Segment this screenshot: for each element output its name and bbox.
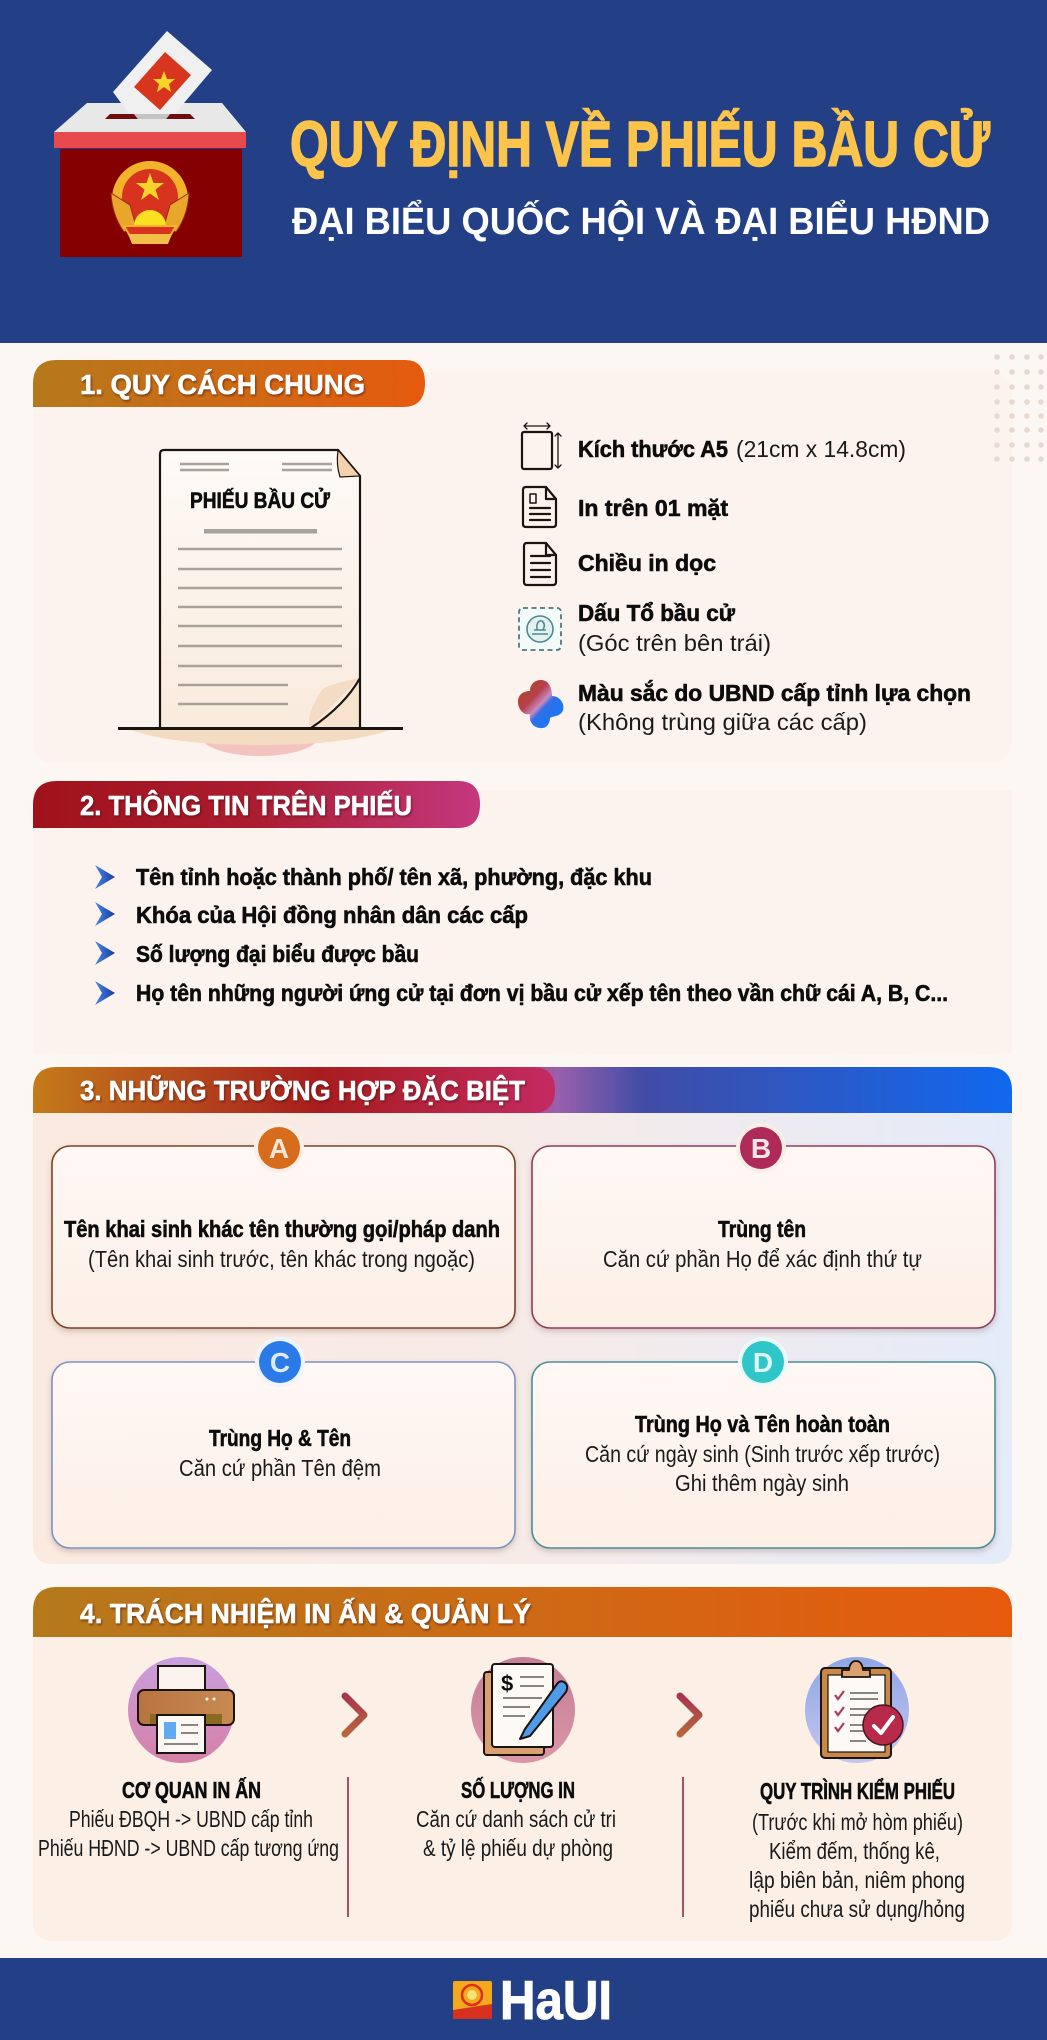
illustration: ballot paper <box>118 450 403 756</box>
header band <box>0 0 1047 343</box>
panel: 1. general specifications <box>33 360 1012 763</box>
icon: printer <box>128 1657 234 1763</box>
column 3: checking process <box>749 1777 965 1922</box>
card D: Ghi thêm ngày sinh <box>675 1470 849 1496</box>
icon: national emblem <box>111 161 189 244</box>
spec: single side <box>523 487 728 527</box>
column 1: printing agency <box>38 1776 339 1861</box>
badge D: D <box>753 1347 773 1378</box>
arrow 2 <box>680 1696 699 1734</box>
heading: section 2 <box>33 781 480 828</box>
bullet 2: Khóa của Hội đồng nhân dân các cấp <box>136 902 528 928</box>
icon: clipboard check <box>805 1657 909 1763</box>
spec: single side: In trên 01 mặt <box>578 495 728 521</box>
decorative dots <box>994 354 1044 462</box>
subtitle: ĐẠI BIỂU QUỐC HỘI VÀ ĐẠI BIỂU HĐND <box>292 198 990 243</box>
column 2: print quantity: SỐ LƯỢNG IN <box>461 1776 575 1803</box>
spec: stamp <box>519 600 771 656</box>
column 2: print quantity: Căn cứ danh sách cử tri <box>416 1806 616 1832</box>
ballot title: PHIẾU BẦU CỬ <box>190 488 331 513</box>
card B: Trùng tên <box>718 1216 806 1242</box>
column 3: checking process: phiếu chưa sử dụng/hỏng <box>749 1896 965 1922</box>
card A: (Tên khai sinh trước, tên khác trong ngoặc) <box>88 1246 475 1272</box>
heading: section 2: 2. THÔNG TIN TRÊN PHIẾU <box>80 789 412 821</box>
badge B: B <box>751 1133 771 1164</box>
icon: document with pen <box>471 1657 575 1763</box>
spec: stamp: Dấu Tổ bầu cử <box>578 600 735 626</box>
card D: Trùng Họ và Tên hoàn toàn <box>635 1411 890 1437</box>
badge A <box>254 1123 304 1173</box>
card A <box>52 1123 515 1328</box>
badge C: C <box>270 1347 290 1378</box>
card C: Trùng Họ & Tên <box>209 1425 351 1451</box>
column 2: print quantity <box>416 1776 616 1861</box>
column 1: printing agency: CƠ QUAN IN ẤN <box>122 1776 261 1803</box>
card C: Căn cứ phần Tên đệm <box>179 1455 381 1481</box>
logo mark <box>453 1981 492 2019</box>
panel: 3. special cases <box>33 1067 1012 1564</box>
bullet 1: Tên tỉnh hoặc thành phố/ tên xã, phường, đặc khu <box>136 864 652 890</box>
spec: portrait: Chiều in dọc <box>578 550 716 576</box>
icon: ballot box <box>54 31 246 257</box>
spec: colour <box>518 679 971 735</box>
badge A: A <box>269 1133 289 1164</box>
icon: document one side <box>523 487 556 527</box>
heading: section 3: 3. NHỮNG TRƯỜNG HỢP ĐẶC BIỆT <box>80 1075 525 1106</box>
card D <box>532 1337 995 1548</box>
badge D <box>738 1337 788 1387</box>
column 2: print quantity: & tỷ lệ phiếu dự phòng <box>423 1835 613 1861</box>
heading: section 3 <box>33 1067 1012 1113</box>
spec: size A5 <box>522 423 906 469</box>
card D: Căn cứ ngày sinh (Sinh trước xếp trước) <box>585 1441 940 1467</box>
spec: portrait <box>524 543 716 585</box>
card B <box>532 1123 995 1328</box>
footer band <box>0 1958 1047 2040</box>
heading: section 4 <box>33 1587 1012 1637</box>
card B: Căn cứ phần Họ để xác định thứ tự <box>603 1246 922 1272</box>
bullet 4: Họ tên những người ứng cử tại đơn vị bầu cử xếp tên theo vần chữ cái A, B, C... <box>136 980 948 1006</box>
heading: section 4: 4. TRÁCH NHIỆM IN ẤN & QUẢN LÝ <box>80 1597 531 1629</box>
bullet 3: Số lượng đại biểu được bầu <box>136 941 419 967</box>
column 1: printing agency: Phiếu ĐBQH -> UBND cấp tỉnh <box>69 1806 313 1832</box>
icon: colour blob <box>518 680 563 728</box>
heading: section 1 <box>33 360 425 407</box>
panel: 2. ballot information <box>33 781 1012 1054</box>
spec: size A5: Kích thước A5 <box>578 436 728 462</box>
spec: colour: Màu sắc do UBND cấp tỉnh lựa chọn <box>578 679 971 706</box>
arrow 1 <box>345 1696 364 1734</box>
column 3: checking process: QUY TRÌNH KIỂM PHIẾU <box>760 1777 955 1804</box>
spec: stamp: (Góc trên bên trái) <box>578 630 771 656</box>
icon: stamp <box>519 608 561 650</box>
panel: 4. printing responsibility <box>33 1587 1012 1941</box>
spec: size A5: (21cm x 14.8cm) <box>736 436 906 462</box>
column 3: checking process: (Trước khi mở hòm phiếu) <box>752 1809 963 1835</box>
column 1: printing agency: Phiếu HĐND -> UBND cấp tương ứng <box>38 1835 339 1861</box>
icon: page dimensions <box>522 423 561 469</box>
heading: section 1: 1. QUY CÁCH CHUNG <box>80 369 365 400</box>
column 3: checking process: lập biên bản, niêm phong <box>749 1867 965 1893</box>
logo wordmark: HaUI <box>500 1969 612 2031</box>
icon: document with pen: $ <box>501 1671 513 1696</box>
card A: Tên khai sinh khác tên thường gọi/pháp danh <box>64 1216 500 1242</box>
badge C <box>255 1337 305 1387</box>
badge B <box>736 1123 786 1173</box>
column 3: checking process: Kiểm đếm, thống kê, <box>769 1838 940 1864</box>
icon: document portrait <box>524 543 556 585</box>
card C <box>52 1337 515 1548</box>
spec: colour: (Không trùng giữa các cấp) <box>578 709 867 735</box>
